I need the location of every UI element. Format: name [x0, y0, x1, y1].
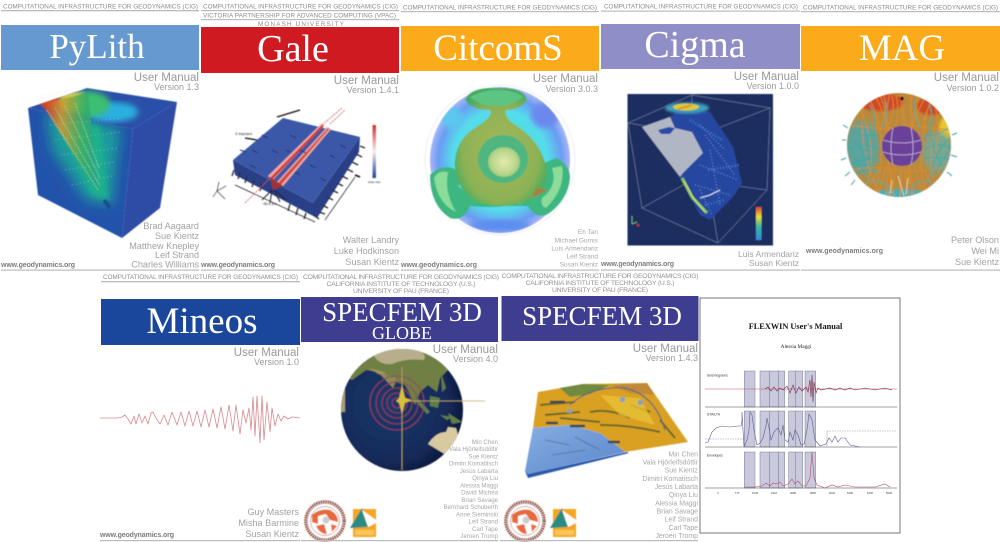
image: rift block: ~80.0 km — [262, 202, 277, 206]
author list: Carl Tape — [669, 525, 698, 532]
title banner: Mineos — [101, 299, 300, 345]
image: magnetic field lines sphere — [841, 92, 957, 200]
image: southern California terrain map — [525, 383, 688, 478]
manual version: Version 1.0.0 — [746, 81, 799, 91]
author list: Anne Sieminski — [456, 512, 498, 518]
author list: Luis Armendariz — [738, 249, 799, 259]
chart: horizontal axis labels: 2310 — [771, 491, 778, 495]
panel: CitcomS manual — [400, 4, 599, 271]
title banner: Mineos: Mineos — [146, 301, 258, 342]
manual version: Version 4.0 — [453, 354, 498, 364]
logo: university of Pau — [350, 508, 376, 537]
author list: Susan Kientz — [245, 529, 299, 539]
manual version: User Manual — [134, 72, 199, 84]
author list: Leif Strand — [665, 516, 698, 524]
chart: seismogram trace — [100, 396, 300, 443]
title banner: SPECFEM 3D GLOBE — [301, 297, 498, 343]
header: SPECFEM GLOBE institutions: UNIVERSITY OF PAU (FRANCE) — [353, 288, 449, 295]
author list: Charles Williams — [131, 260, 199, 270]
author list: Jeroen Tromp — [460, 533, 499, 540]
title banner: SPECFEM 3D — [502, 296, 698, 341]
author list: Michael Gurnis — [555, 238, 599, 244]
manual version: Version 3.0.3 — [545, 84, 598, 94]
author list: Guy Masters — [247, 507, 299, 517]
manual version: User Manual — [433, 344, 498, 356]
author list: Leif Strand — [469, 519, 498, 526]
author list — [334, 235, 399, 267]
author list: Misha Barmine — [238, 518, 299, 528]
author list: Luke Hodkinson — [334, 246, 399, 256]
author list — [951, 235, 999, 267]
chart: horizontal axis labels: 0 — [717, 491, 719, 495]
author list: Sue Kientz — [469, 454, 498, 460]
manual version: User Manual — [234, 347, 299, 359]
header: SPECFEM 3D institutions: UNIVERSITY OF PAU (FRANCE) — [552, 287, 648, 294]
author list: Bernhard Schuberth — [443, 504, 498, 511]
author list — [443, 439, 499, 540]
bottom rule — [301, 540, 498, 541]
manual version: Version 1.0.2 — [946, 83, 999, 93]
author list: Qinya Liu — [669, 492, 698, 499]
author list: Brad Aagaard — [143, 221, 199, 231]
header: Gale institutions: VICTORIA PARTNERSHIP FOR ADVANCED COMPUTING (VPAC) — [203, 12, 396, 20]
chart: horizontal axis labels: 5390 — [847, 491, 854, 495]
author list: Matthew Knepley — [129, 241, 199, 251]
author list: Sue Kientz — [955, 257, 999, 267]
author list: Walter Landry — [343, 235, 399, 245]
author list — [238, 507, 299, 539]
manual version: Version 1.3 — [154, 82, 199, 92]
website: www.geodynamics.org — [400, 262, 477, 269]
chart: envelopes panel — [705, 452, 897, 488]
author list: Leif Strand — [155, 250, 199, 260]
title banner: CitcomS — [401, 26, 599, 71]
header: Gale institutions: COMPUTATIONAL INFRASTRUCTURE FOR GEODYNAMICS (CIG) — [203, 4, 398, 10]
author list: Jesús Labarta — [655, 484, 698, 491]
author list: Wei Mi — [971, 246, 999, 256]
bottom rule — [500, 540, 698, 541]
panel: PyLith manual — [0, 4, 199, 271]
author list: Alessia Maggi — [460, 482, 498, 490]
header: CitcomS institution: COMPUTATIONAL INFRASTRUCTURE FOR GEODYNAMICS (CIG) — [403, 4, 597, 12]
header: MAG institution: COMPUTATIONAL INFRASTRUCTURE FOR GEODYNAMICS (CIG) — [803, 4, 998, 12]
website: www.geodynamics.org — [805, 248, 883, 255]
header: SPECFEM GLOBE institutions — [303, 274, 499, 295]
title banner: PyLith — [1, 25, 199, 70]
header: Gale institutions: MONASH UNIVERSITY — [258, 21, 345, 28]
image: rift block: strain rate — [368, 180, 381, 184]
chart: horizontal axis labels — [717, 491, 893, 495]
author list: Susan Kientz — [560, 262, 598, 268]
chart: horizontal axis labels: 6930 — [886, 491, 893, 495]
panel: Mineos manual — [99, 274, 300, 541]
manual version — [734, 71, 799, 91]
image: mantle convection sphere — [425, 85, 575, 235]
author list: Dimitri Komatitsch — [642, 476, 698, 483]
title banner: SPECFEM 3D: SPECFEM 3D — [522, 301, 682, 331]
author list: Susan Kientz — [749, 258, 799, 268]
title banner: SPECFEM 3D GLOBE: SPECFEM 3D — [322, 297, 482, 327]
header: PyLith institution: COMPUTATIONAL INFRASTRUCTURE FOR GEODYNAMICS (CIG) — [3, 4, 198, 10]
website: www.geodynamics.org — [200, 262, 275, 269]
page frame — [700, 298, 900, 533]
title banner: Gale — [201, 27, 399, 73]
chart: STA/LTA panel: STA/LTA — [707, 412, 721, 416]
chart: horizontal axis labels: 1540 — [752, 491, 759, 495]
title banner: Cigma: Cigma — [644, 24, 746, 66]
author list: Eh Tan — [578, 229, 598, 236]
manual version — [533, 73, 598, 94]
panel: SPECFEM 3D GLOBE manual — [301, 274, 499, 541]
chart: STA/LTA panel — [705, 411, 897, 447]
chart: horizontal axis labels: 6160 — [867, 491, 874, 495]
author list: Jesús Labarta — [460, 468, 499, 475]
author list: Jeroen Tromp — [655, 533, 698, 540]
image: earth globe with seismic waves — [340, 345, 485, 471]
title banner: PyLith: PyLith — [49, 27, 145, 66]
header: SPECFEM GLOBE institutions: COMPUTATIONAL INFRASTRUCTURE FOR GEODYNAMICS (CIG) — [303, 274, 499, 281]
manual version — [334, 75, 399, 95]
header: SPECFEM GLOBE institutions: CALIFORNIA INSTITUTE OF TECHNOLOGY (U.S.) — [326, 281, 476, 288]
panel: Gale manual — [200, 4, 399, 271]
author: Alessia Maggi: Alessia Maggi — [781, 344, 812, 350]
author list — [642, 452, 699, 540]
author list: Sue Kientz — [155, 231, 199, 241]
panel: Cigma manual — [600, 4, 800, 271]
image: rift block: G imposed — [235, 132, 252, 136]
header: SPECFEM 3D institutions — [502, 273, 698, 294]
bottom rule — [801, 270, 1000, 271]
author list: Dimitri Komatitsch — [449, 461, 498, 468]
panel: FLEXWIN manual — [700, 298, 900, 533]
author list: Brian Savage — [461, 497, 499, 504]
author list: Carl Tape — [472, 526, 499, 533]
title banner: Cigma — [601, 24, 800, 69]
author list: Sue Kientz — [665, 468, 699, 474]
chart: seismograms panel: Seismograms — [707, 374, 728, 378]
header: Mineos institution: COMPUTATIONAL INFRASTRUCTURE FOR GEODYNAMICS (CIG) — [103, 274, 298, 281]
author list: Vala Hjörleifsdóttir — [449, 446, 498, 453]
manual version: User Manual — [334, 75, 399, 87]
image: rift block — [213, 108, 381, 222]
manual version — [433, 344, 498, 364]
title banner: MAG — [801, 26, 1000, 71]
manual version: Version 1.4.3 — [645, 353, 698, 363]
title banner: CitcomS: CitcomS — [433, 28, 563, 69]
manual version — [633, 343, 698, 363]
chart: seismograms panel — [705, 371, 897, 407]
manual version: User Manual — [633, 343, 698, 355]
manual version: User Manual — [533, 73, 598, 85]
header: SPECFEM 3D institutions: COMPUTATIONAL INFRASTRUCTURE FOR GEODYNAMICS (CIG) — [502, 273, 698, 280]
website: www.geodynamics.org — [99, 532, 174, 539]
author list — [738, 249, 799, 268]
image: earthquake fault visualisation — [628, 94, 773, 246]
manual version — [934, 72, 999, 93]
author list — [129, 221, 199, 270]
author list: Luis Armendariz — [551, 246, 598, 252]
header: Gale institutions — [201, 4, 399, 28]
author list — [551, 229, 599, 268]
author list: Qinya Liu — [472, 475, 498, 482]
chart: envelopes panel: Envelopes — [707, 454, 723, 458]
author list: Peter Olson — [951, 235, 999, 245]
logo: university of Pau — [550, 508, 576, 537]
manual version — [134, 72, 199, 92]
website: www.geodynamics.org — [600, 261, 674, 268]
author list: Min Chen — [472, 439, 498, 446]
title: FLEXWIN: FLEXWIN User's Manual — [749, 322, 843, 331]
author list: Min Chen — [668, 452, 698, 458]
manual version: User Manual — [734, 71, 799, 83]
website: www.geodynamics.org — [0, 262, 75, 269]
author list: Vala Hjörleifsdóttir — [643, 460, 699, 466]
chart: horizontal axis labels: 3850 — [810, 491, 817, 495]
title banner: MAG: MAG — [859, 28, 945, 69]
header: Cigma institution: COMPUTATIONAL INFRASTRUCTURE FOR GEODYNAMICS (CIG) — [604, 4, 798, 10]
author list: David Michéa — [461, 490, 499, 497]
manual version — [234, 347, 299, 367]
chart: horizontal axis labels: 770 — [735, 491, 740, 495]
author list: Brian Savage — [657, 508, 698, 516]
manual version: Version 1.4.1 — [346, 85, 399, 95]
manual version: User Manual — [934, 72, 999, 84]
logo: seismological laboratory — [506, 502, 544, 540]
author list: Alessia Maggi — [655, 500, 698, 508]
author list: Leif Strand — [567, 254, 598, 260]
chart: horizontal axis labels: 3080 — [790, 491, 797, 495]
chart: horizontal axis labels: 4620 — [829, 491, 836, 495]
image: fault cube — [28, 88, 177, 238]
header: SPECFEM 3D institutions: CALIFORNIA INSTITUTE OF TECHNOLOGY (U.S.) — [526, 280, 674, 287]
panel: MAG manual — [801, 4, 1000, 271]
author list: Susan Kientz — [345, 257, 399, 267]
logo: seismological laboratory — [306, 502, 344, 540]
panel: SPECFEM 3D manual — [500, 273, 699, 541]
manual version: Version 1.0 — [254, 357, 299, 367]
title banner: SPECFEM 3D GLOBE: GLOBE — [372, 323, 432, 343]
title banner: Gale: Gale — [257, 28, 329, 70]
